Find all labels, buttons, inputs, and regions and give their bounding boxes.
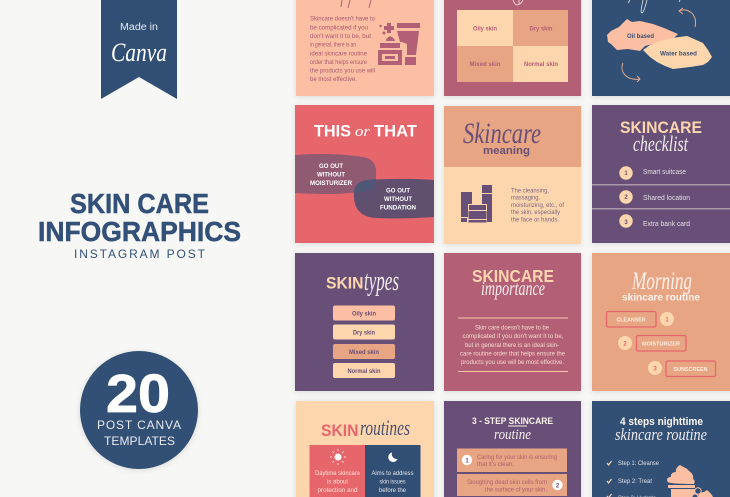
heading: THIS: [314, 122, 351, 140]
body text: be most effective.: [310, 76, 357, 83]
icon: cream jar: [667, 465, 713, 497]
subheading: skincare routine: [622, 292, 700, 304]
ribbon: Made in Canva: Canva: [111, 38, 167, 67]
blob: left option: [295, 154, 376, 194]
step 1: CLEANSER: [616, 318, 646, 324]
blob: oil based: [607, 19, 678, 51]
body text: The cleansing,: [511, 188, 549, 194]
step box 2: the surface of your skin.: [485, 486, 547, 494]
arrows: [622, 8, 696, 82]
step 1: 1: [665, 318, 669, 324]
body text: care routine order that helps ensure the: [460, 350, 565, 358]
button labels: Dry skin: [353, 330, 375, 336]
step box 2: [457, 474, 567, 497]
step 3: [648, 361, 716, 376]
icon: cosmetic bottles: [461, 185, 492, 223]
icon: cosmetic jar and tube: [378, 23, 420, 65]
icon: moon: [388, 452, 398, 462]
checklist item 1: [619, 166, 686, 180]
grid labels: Mixed skin: [470, 62, 501, 68]
step box 1: [457, 448, 567, 472]
night column: [365, 445, 420, 497]
script title fragment: [628, 0, 680, 13]
script subheading: routine: [494, 427, 531, 443]
option labels: GO OUT: [319, 164, 343, 170]
panel: this or that: [295, 105, 434, 243]
panel: morning skincare routine: [592, 253, 730, 391]
grid labels: Normal skin: [524, 62, 558, 68]
step 1: [606, 312, 674, 327]
heading: SKINCARE: [620, 118, 702, 137]
heading: SKIN: [321, 422, 358, 440]
script heading: routines: [360, 415, 410, 440]
script subheading: skincare routine: [615, 425, 707, 444]
script title fragment: [341, 0, 371, 8]
body text: order that helps ensure: [310, 59, 367, 66]
grid cells: [457, 10, 513, 46]
ribbon: Made in Canva: Made in: [120, 22, 158, 33]
body text: complicated if you don't want it to be,: [462, 333, 564, 340]
badge: 20 post canva templates: [80, 351, 198, 469]
day text: [315, 470, 360, 494]
heading: SKIN: [326, 274, 364, 292]
step 3: 3: [653, 366, 657, 372]
title: [38, 188, 241, 261]
step box 1: Caring for your skin is ensuring: [477, 454, 558, 461]
heading: 4 steps nighttime: [620, 416, 703, 428]
title: SKIN CARE: [70, 188, 209, 219]
body text: but in general there is an ideal skin-: [465, 342, 559, 349]
panel header: [444, 106, 581, 167]
grid labels: Oily skin: [473, 26, 497, 32]
night text: [372, 470, 414, 494]
step 2: [607, 478, 652, 485]
checklist item 1: 1: [624, 171, 628, 177]
body text: be complicated if you: [310, 24, 368, 32]
panel: skin type grid: [444, 0, 581, 96]
step box 1: 1: [465, 458, 469, 464]
checklist item 3: 3: [624, 220, 628, 226]
panel: 4 steps nighttime routine: [592, 401, 730, 497]
button labels: Normal skin: [348, 368, 381, 375]
grid labels: [470, 26, 558, 68]
subheading: meaning: [483, 145, 530, 157]
script subheading: importance: [481, 278, 545, 300]
option labels: MOISTURIZER: [310, 181, 353, 187]
panel: skincare meaning: [444, 106, 581, 244]
badge: 20 post canva templates: POST CANVA: [97, 418, 181, 432]
panel: skin types: [295, 253, 434, 391]
icon: sun: [330, 449, 346, 465]
body text: the skin, especially: [511, 209, 561, 216]
blob: right option: [354, 179, 434, 218]
day text: protection and: [318, 487, 358, 494]
option labels: FUNDATION: [380, 206, 416, 212]
body text: ideal skincare routine: [310, 50, 367, 58]
script heading: types: [364, 266, 399, 297]
heading: SKINCARE: [472, 266, 554, 286]
grid labels: Dry skin: [530, 26, 553, 32]
checklist item 2: Shared location: [643, 195, 690, 202]
title: INSTAGRAM POST: [74, 247, 206, 261]
night text: before the: [379, 487, 406, 494]
step box 2: 2: [556, 484, 560, 490]
body text: in general, there is an: [310, 42, 356, 48]
checklist item 3: [619, 214, 690, 228]
title: INFOGRAPHICS: [38, 216, 241, 247]
divider lines: [592, 184, 730, 186]
step 2: Step 2: Treat: [618, 478, 652, 485]
panel: this or that: or: [355, 124, 370, 140]
blob: water based: [643, 36, 712, 69]
script subheading: checklist: [633, 131, 689, 156]
rules: [458, 318, 568, 319]
day text: Daytime skincare: [315, 470, 360, 477]
badge: 20 post canva templates: TEMPLATES: [104, 434, 175, 448]
step 3: [607, 494, 656, 497]
step 1: Step 1: Cleanse: [618, 460, 659, 467]
badge: 20 post canva templates: 20: [106, 364, 170, 424]
step 1: [607, 460, 659, 467]
button labels: Oily skin: [352, 310, 376, 318]
panel: oil vs water based: Water based: [660, 50, 697, 58]
panel: skincare checklist: [592, 105, 730, 243]
body text: Skincare doesn't have to: [310, 16, 375, 22]
checklist item 3: Extra bank card: [643, 221, 690, 228]
step 2: [618, 336, 686, 351]
panel: skin routines: [296, 401, 434, 497]
panel: oil vs water based: [592, 0, 730, 96]
step 2: 2: [623, 342, 627, 348]
step 2: MOISTURIZER: [642, 342, 680, 348]
script title fragment: [513, 0, 523, 5]
panel: 3 step skincare routine: [444, 401, 581, 497]
body text: [511, 188, 564, 224]
panel: this or that: THAT: [374, 122, 418, 140]
body text: the products you use will: [310, 68, 375, 74]
body text: products you use will be most effective.: [461, 359, 564, 366]
option labels: GO OUT: [386, 188, 410, 194]
type buttons: [333, 306, 395, 320]
option labels: WITHOUT: [317, 172, 345, 178]
body text: [310, 16, 375, 83]
day text: is about: [327, 478, 348, 486]
script heading: Morning: [631, 268, 692, 295]
day column: [310, 445, 365, 497]
blob labels: Oil based: [627, 33, 654, 40]
step box 2: Sloughing dead skin cells from: [467, 479, 547, 486]
body text: [460, 324, 565, 366]
checklist item 2: 2: [624, 195, 628, 201]
heading: 3 - STEP SKINCARE: [472, 416, 553, 427]
checklist item 1: Smart suitcase: [643, 169, 686, 176]
panel: skincare importance: [444, 253, 581, 391]
body text: massaging,: [511, 194, 540, 202]
night text: skin issues: [380, 478, 406, 486]
step box 1: that it's clean.: [477, 461, 514, 468]
body text: don't want it to be, but: [310, 33, 371, 40]
body text: moisturizing, etc., of: [511, 202, 564, 209]
body text: the face or hands.: [511, 216, 559, 224]
button labels: [348, 310, 381, 375]
blob overlap: [354, 179, 376, 193]
body text: Skin care doesn't have to be: [475, 324, 549, 332]
night text: Aims to address: [372, 470, 414, 477]
ribbon: Made in Canva: [101, 0, 177, 99]
button labels: Mixed skin: [349, 349, 379, 356]
option labels: [310, 164, 416, 212]
script heading: Skincare: [463, 117, 541, 150]
checklist item 2: [619, 190, 690, 204]
option labels: WITHOUT: [384, 197, 412, 203]
panel: skincare routine intro: [296, 0, 434, 96]
step 3: SUNSCREEN: [674, 367, 708, 373]
